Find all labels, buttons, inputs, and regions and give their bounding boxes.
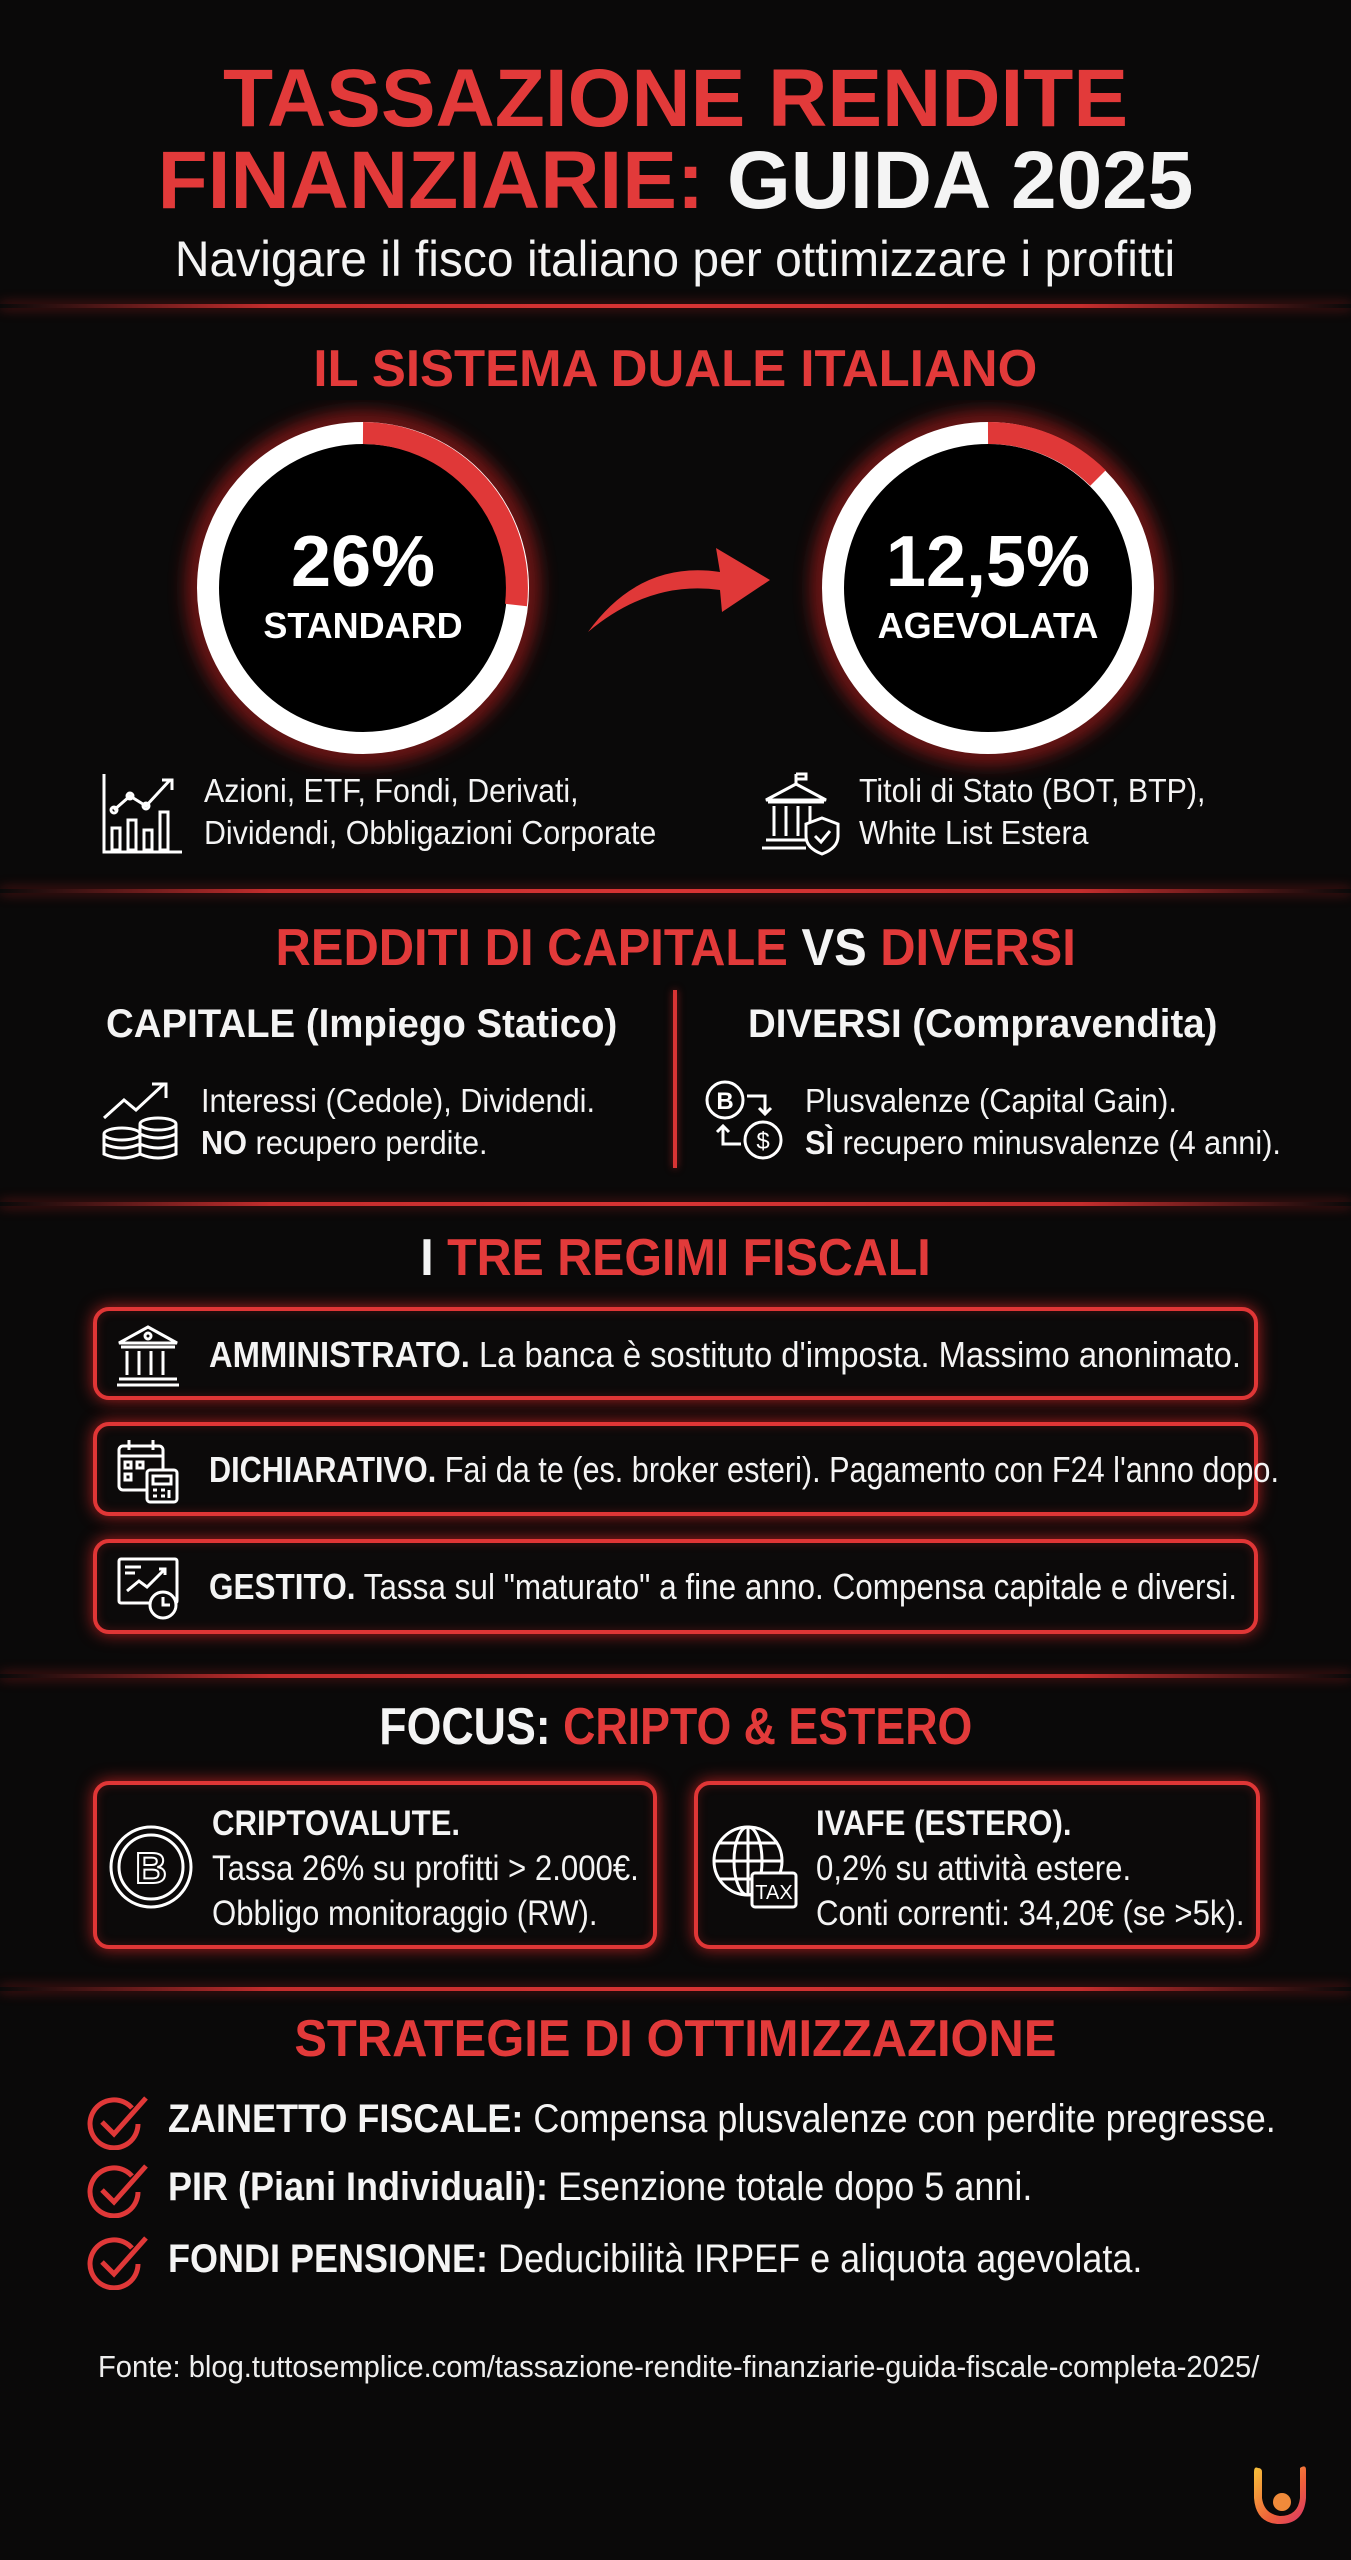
box: dichiarativo (93, 1422, 1258, 1516)
icon: calendar calculator (118, 1440, 178, 1504)
icon: chart clock (118, 1558, 178, 1620)
icon: exchange (706, 1080, 782, 1160)
heading: sistema duale: IL SISTEMA DUALE ITALIANO (314, 340, 1037, 398)
title (158, 53, 1193, 226)
text: capitale: Interessi (Cedole), Dividendi. (201, 1082, 595, 1119)
title: TASSAZIONE RENDITE (223, 53, 1128, 144)
circle: 12,5% agevolata: 12,5% (886, 522, 1090, 602)
text: diversi: SÌ recupero minusvalenze (4 anni). (805, 1124, 1281, 1161)
circle: 26% standard (197, 422, 529, 754)
logo (1254, 2466, 1306, 2524)
box: ivafe (694, 1781, 1260, 1949)
text: 26% assets: Azioni, ETF, Fondi, Derivati, (204, 772, 579, 809)
text: diversi (805, 1082, 1281, 1161)
text: 26% assets: Dividendi, Obbligazioni Corporate (204, 814, 656, 851)
icon: exchange: $ (756, 1128, 770, 1155)
icon: globe tax (712, 1826, 798, 1908)
text: capitale: NO recupero perdite. (201, 1124, 488, 1161)
item: fondi pensione: FONDI PENSIONE: Deducibilità IRPEF e aliquota agevolata. (168, 2237, 1142, 2281)
circle: 12,5% agevolata (822, 422, 1154, 754)
text: cripto (212, 1804, 639, 1933)
text: ivafe: IVAFE (ESTERO). (816, 1804, 1072, 1843)
icon: globe tax: TAX (755, 1882, 793, 1904)
text: diversi: Plusvalenze (Capital Gain). (805, 1082, 1177, 1119)
heading: strategie: STRATEGIE DI OTTIMIZZAZIONE (294, 2010, 1057, 2068)
text: amministrato: AMMINISTRATO. La banca è sostituto d'imposta. Massimo anonimato. (209, 1334, 1241, 1375)
icon: government building (762, 772, 840, 856)
icon: bitcoin (110, 1826, 192, 1908)
text: 12,5% assets (859, 772, 1205, 851)
heading: tre regimi: I TRE REGIMI FISCALI (420, 1229, 931, 1287)
circle: 12,5% agevolata: AGEVOLATA (878, 605, 1098, 646)
box: criptovalute (93, 1781, 657, 1949)
subtitle: Navigare il fisco italiano per ottimizzare i profitti (175, 231, 1176, 287)
circle: 26% standard: 26% (291, 522, 435, 602)
text: ivafe: Conti correnti: 34,20€ (se >5k). (816, 1894, 1245, 1933)
text: cripto: CRIPTOVALUTE. (212, 1804, 460, 1843)
icon: coins growth (102, 1082, 178, 1160)
chart: rate circles (175, 400, 1176, 776)
item: zainetto: ZAINETTO FISCALE: Compensa plusvalenze con perdite pregresse. (168, 2097, 1276, 2141)
text: ivafe (816, 1804, 1245, 1933)
icon: bank (117, 1325, 179, 1386)
heading: focus: FOCUS: CRIPTO & ESTERO (379, 1698, 972, 1756)
panel: capitale (102, 1002, 617, 1161)
text: ivafe: 0,2% su attività estere. (816, 1849, 1131, 1888)
item: pir: PIR (Piani Individuali): Esenzione totale dopo 5 anni. (168, 2165, 1032, 2209)
text: gestito: GESTITO. Tassa sul "maturato" a fine anno. Compensa capitale e diversi. (209, 1566, 1237, 1607)
arrow (588, 548, 770, 632)
source: Fonte: blog.tuttosemplice.com/tassazione-rendite-finanziarie-guida-fiscale-completa-2025/ (98, 2349, 1259, 2384)
subheading: diversi: DIVERSI (Compravendita) (748, 1002, 1217, 1046)
icon: bitcoin: B (135, 1844, 167, 1893)
text: capitale (201, 1082, 595, 1161)
text: cripto: Obbligo monitoraggio (RW). (212, 1894, 598, 1933)
heading: redditi: REDDITI DI CAPITALE VS DIVERSI (275, 919, 1076, 977)
list: strategie (88, 2096, 1276, 2290)
circle: 26% standard: STANDARD (263, 605, 463, 646)
subheading: capitale: CAPITALE (Impiego Statico) (106, 1002, 617, 1046)
box: gestito (93, 1539, 1258, 1634)
text: 26% assets (204, 772, 656, 851)
text: 12,5% assets: Titoli di Stato (BOT, BTP), (859, 772, 1205, 809)
text: dichiarativo: DICHIARATIVO. Fai da te (es. broker esteri). Pagamento con F24 l'anno dopo. (209, 1449, 1279, 1490)
icon: chart (102, 774, 182, 854)
box: amministrato (93, 1307, 1258, 1400)
vertical divider (673, 990, 677, 1168)
panel: diversi (706, 1002, 1281, 1161)
text: 12,5% assets: White List Estera (859, 814, 1088, 851)
text: cripto: Tassa 26% su profitti > 2.000€. (212, 1849, 639, 1888)
title: FINANZIARIE: GUIDA 2025 (158, 135, 1193, 226)
icon: exchange: B (716, 1088, 734, 1115)
